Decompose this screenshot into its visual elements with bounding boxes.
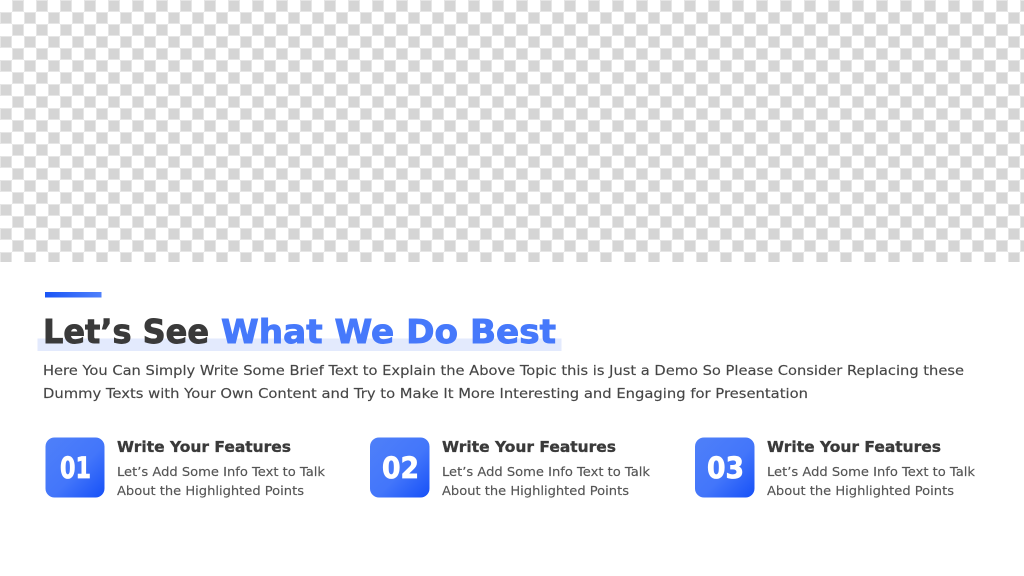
feature 01 description: About the Highlighted Points <box>117 484 304 498</box>
feature 03 description: Let’s Add Some Info Text to Talk <box>767 465 975 479</box>
intro text: Dummy Texts with Your Own Content and Try to Make It More Interesting and Engaging for Presentation <box>43 386 808 402</box>
accent bar <box>45 292 102 298</box>
title: Let’s See <box>43 312 209 351</box>
transparency checkerboard placeholder <box>0 0 1024 262</box>
icon: number badge 02 <box>370 438 430 498</box>
title <box>43 312 556 351</box>
title highlight band <box>38 338 562 351</box>
feature 01 description: Let’s Add Some Info Text to Talk <box>117 465 325 479</box>
icon: number badge 03: 03 <box>707 451 744 485</box>
intro text: Here You Can Simply Write Some Brief Text to Explain the Above Topic this is Just a Demo So Please Consider Replacing these <box>43 363 964 379</box>
feature 01 heading: Write Your Features <box>117 438 291 456</box>
feature 02 heading: Write Your Features <box>442 438 616 456</box>
title: What We Do Best <box>221 312 556 351</box>
feature 01 <box>46 438 325 498</box>
feature 03 description: About the Highlighted Points <box>767 484 954 498</box>
icon: number badge 02: 02 <box>382 451 419 485</box>
feature 03 <box>695 438 975 498</box>
feature 03 description <box>767 465 975 498</box>
feature 02 description: About the Highlighted Points <box>442 484 629 498</box>
feature 02 <box>370 438 650 498</box>
feature 02 description: Let’s Add Some Info Text to Talk <box>442 465 650 479</box>
intro text <box>43 363 964 402</box>
icon: number badge 01: 01 <box>60 451 91 485</box>
feature 01 description <box>117 465 325 498</box>
icon: number badge 03 <box>695 438 754 498</box>
icon: number badge 01 <box>46 438 104 498</box>
feature 02 description <box>442 465 650 498</box>
feature 03 heading: Write Your Features <box>767 438 941 456</box>
